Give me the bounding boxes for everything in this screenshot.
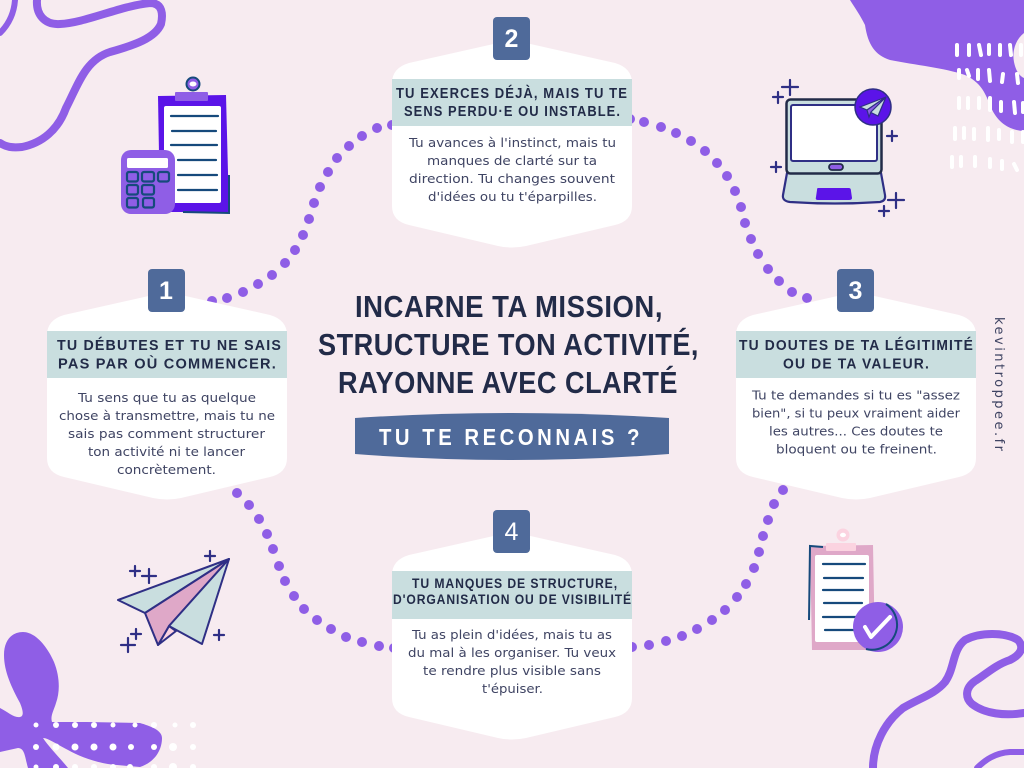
card 1 body text: chose à transmettre, mais tu ne <box>59 409 275 424</box>
card 3 number badge <box>837 269 874 312</box>
card 2 background <box>392 42 632 248</box>
dotted connector: card 4 to card 1 <box>232 488 399 653</box>
card 3 body text: bloquent ou te freinent. <box>776 442 937 458</box>
card 1 heading: PAS PAR OÙ COMMENCER. <box>58 354 277 372</box>
dotted connector: card 1 to card 2 <box>207 120 397 306</box>
card 4 body text: du mal à les organiser. Tu veux <box>408 646 616 661</box>
card 4 heading band <box>392 571 632 619</box>
card 3 body text: Tu te demandes si tu es "assez <box>751 388 960 404</box>
card 2 heading: TU EXERCES DÉJÀ, MAIS TU TE <box>396 85 628 102</box>
card 1 body text: Tu sens que tu as quelque <box>77 391 256 406</box>
card 3 body text: les autres... Ces doutes te <box>769 424 943 440</box>
card 1 heading: TU DÉBUTES ET TU NE SAIS <box>57 337 282 354</box>
card 2 heading: SENS PERDU·E OU INSTABLE. <box>404 104 621 120</box>
card 3 background <box>736 294 976 500</box>
banner: tu te reconnais: TU TE RECONNAIS ? <box>379 424 643 450</box>
panel: card 4 <box>392 510 632 740</box>
card 4 heading <box>393 576 632 607</box>
card 1 body text: concrètement. <box>117 463 216 478</box>
card 3 number: 3 <box>849 277 862 305</box>
card 1 heading band <box>47 331 287 378</box>
icon: clipboard and calculator <box>121 78 229 214</box>
card 3 heading band <box>736 331 976 378</box>
card 4 body text: t'épuiser. <box>482 682 543 697</box>
card 1 body text <box>59 391 275 478</box>
icon: clipboard with check badge <box>809 528 903 652</box>
card 1 body text: sais pas comment structurer <box>68 427 266 442</box>
title <box>318 289 699 400</box>
card 4 heading: D'ORGANISATION OU DE VISIBILITÉ <box>393 592 632 607</box>
card 1 background <box>47 294 287 500</box>
title: RAYONNE AVEC CLARTÉ <box>338 365 678 400</box>
card 2 heading band <box>392 79 632 126</box>
title: STRUCTURE TON ACTIVITÉ, <box>318 327 699 362</box>
dotted connector: card 2 to card 3 <box>625 114 812 303</box>
card 1 number badge <box>148 269 185 312</box>
side text: website: kevintroppee.fr <box>991 317 1006 452</box>
card 1 body text: ton activité ni te lancer <box>88 445 246 460</box>
decoration: bottom-right squiggle <box>873 634 1024 768</box>
panel: card 2 <box>392 17 632 248</box>
card 3 heading <box>739 337 974 372</box>
card 2 body text: Tu avances à l'instinct, mais tu <box>408 136 616 151</box>
banner: tu te reconnais <box>355 413 669 460</box>
panel: card 3 <box>736 269 976 500</box>
card 4 body text <box>408 628 616 697</box>
card 3 heading: OU DE TA VALEUR. <box>783 356 930 372</box>
card 2 heading <box>396 85 628 120</box>
decoration: top-right blob with white dashes <box>850 0 1024 170</box>
card 2 number: 2 <box>505 25 518 53</box>
card 4 heading: TU MANQUES DE STRUCTURE, <box>412 576 618 591</box>
card 2 body text <box>408 136 616 205</box>
card 3 body text: bien", si tu peux vraiment aider <box>752 406 961 422</box>
card 4 body text: te rendre plus visible sans <box>423 664 601 679</box>
card 1 number: 1 <box>159 277 173 305</box>
card 4 background <box>392 534 632 740</box>
card 4 number badge <box>493 510 530 553</box>
card 4 body text: Tu as plein d'idées, mais tu as <box>411 628 612 643</box>
icon: paper plane <box>118 551 229 652</box>
panel: card 1 <box>47 269 287 500</box>
decoration: bottom-left flower blob with white dots <box>0 632 196 768</box>
decoration: top-left squiggle <box>0 0 162 147</box>
card 2 number badge <box>493 17 530 60</box>
title: INCARNE TA MISSION, <box>355 289 663 324</box>
dotted connector: card 3 to card 4 <box>627 485 788 652</box>
card 1 heading <box>57 337 282 372</box>
card 2 body text: d'idées ou tu t'éparpilles. <box>428 190 597 205</box>
card 3 body text <box>751 388 961 458</box>
card 3 heading: TU DOUTES DE TA LÉGITIMITÉ <box>739 337 974 354</box>
card 2 body text: manques de clarté sur ta <box>427 154 597 169</box>
card 4 number: 4 <box>505 518 519 546</box>
icon: laptop with paper plane badge <box>771 80 904 216</box>
card 2 body text: direction. Tu changes souvent <box>409 172 615 187</box>
